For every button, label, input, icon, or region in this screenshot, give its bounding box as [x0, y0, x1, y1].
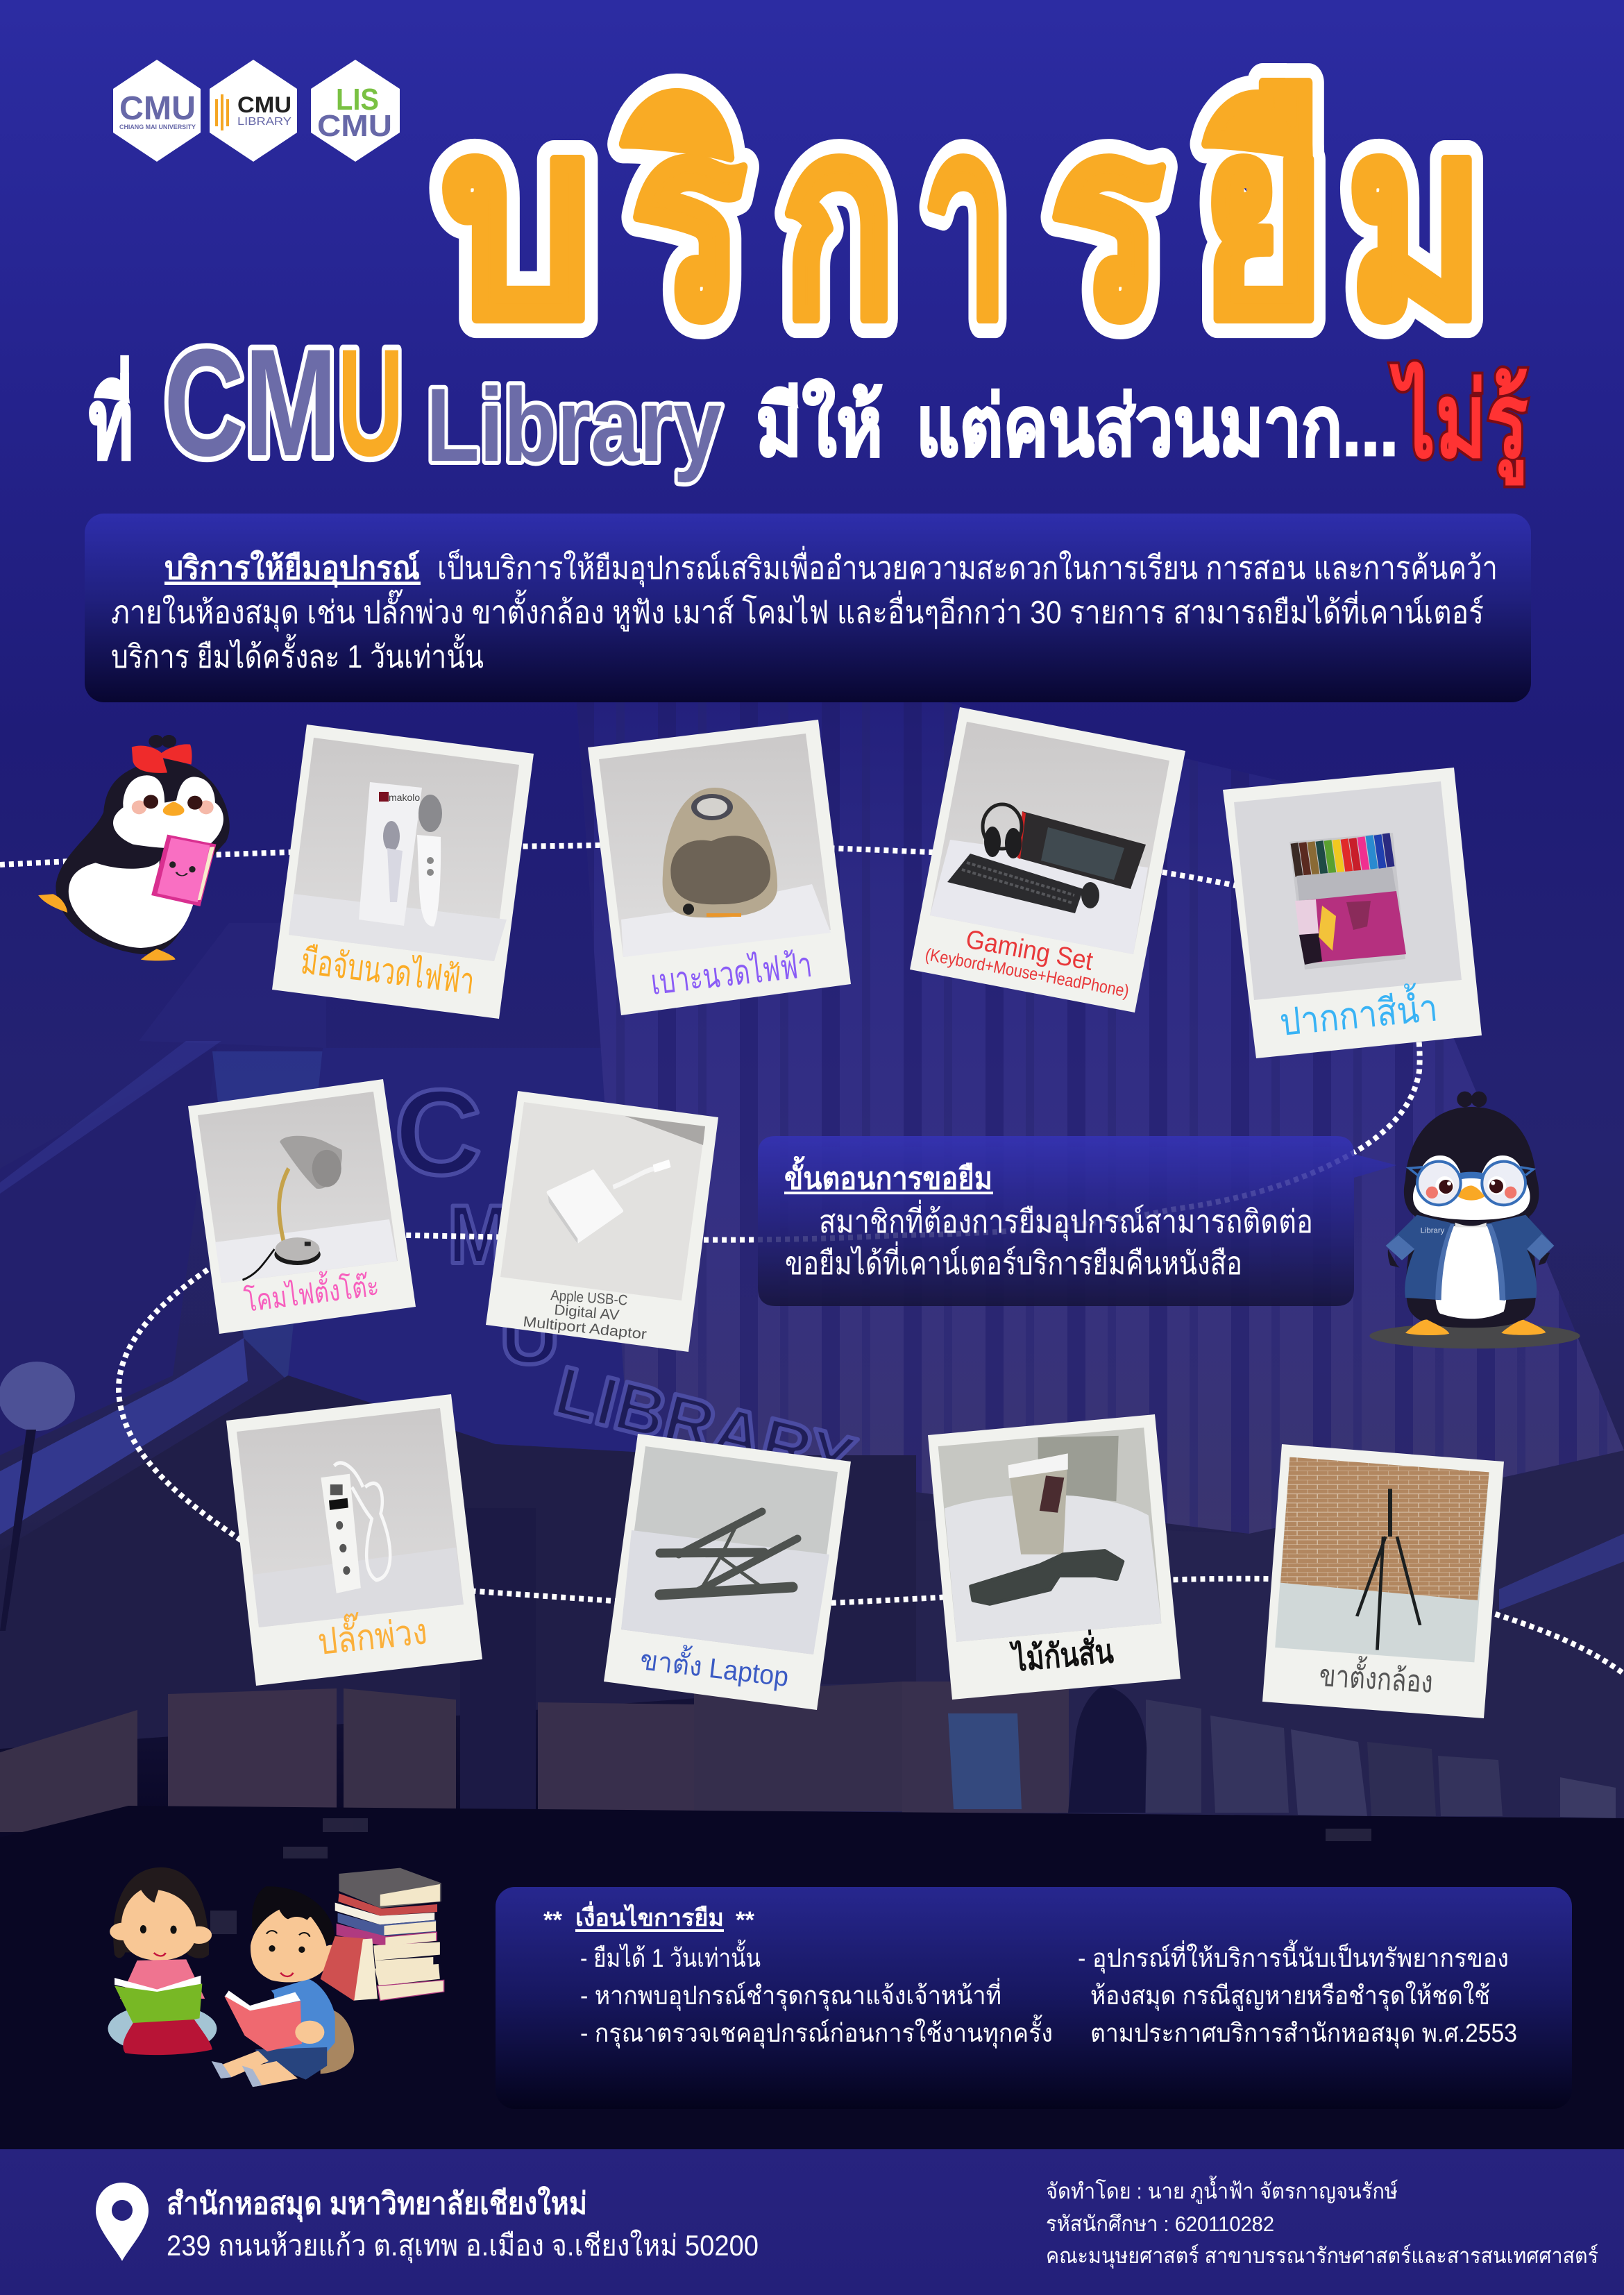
background signage: CMU LIBRARY letters: M — [448, 1188, 510, 1281]
penguin with glasses and jacket — [1369, 1092, 1580, 1348]
photo card: tripod — [1262, 1444, 1504, 1718]
photo card: laptop stand — [604, 1434, 851, 1710]
callout: borrowing steps — [758, 1136, 1396, 1306]
label: ปลั๊กพ่วง — [315, 1605, 429, 1663]
title: ร — [1049, 69, 1164, 372]
title: ก — [781, 69, 896, 372]
footer — [0, 2149, 1624, 2295]
title: ก — [781, 69, 896, 372]
title: ริ — [621, 69, 745, 372]
label: ขาตั้งกล้อง — [1318, 1653, 1435, 1700]
background signage: CMU LIBRARY letters: LIBRARY — [548, 1352, 863, 1501]
label: Gaming Set — [963, 925, 1095, 976]
photo card: power strip — [226, 1394, 482, 1686]
credits: จัดทำโดย : นาย ภูน้ำฟ้า จัตรกาญจนรักษ์ — [1046, 2176, 1398, 2204]
logo: LIS CMU: LIS — [336, 83, 379, 117]
service text: บริการ ยืมได้ครั้งละ 1 วันเท่านั้น — [111, 634, 484, 675]
title: บ — [441, 69, 594, 372]
label — [924, 925, 1131, 1001]
background signage: CMU LIBRARY letters: C — [394, 1065, 482, 1201]
illustration: children reading with books — [108, 1868, 444, 2087]
service text: ภายในห้องสมุด เช่น ปลั๊กพ่วง ขาตั้งกล้อง หูฟัง เมาส์ โคมไฟ และอื่นๆอีกกว่า 30 รายการ สามารถยืมได้ที่เคาน์เตอร์ — [111, 589, 1484, 632]
label: Multiport Adaptor — [522, 1314, 648, 1343]
label: ไม้กันสั่น — [1008, 1627, 1115, 1679]
panel: service description — [85, 514, 1531, 702]
conditions list left: - ยืมได้ 1 วันเท่านั้น — [580, 1939, 761, 1972]
callout heading: ขั้นตอนการขอยืม — [784, 1155, 992, 1196]
illustration: stack of books — [321, 1868, 444, 2001]
icon: location pin — [96, 2183, 149, 2261]
library name and address — [167, 2185, 759, 2264]
subtitle: มีให้ — [756, 379, 883, 473]
photo card: water color pens — [1223, 768, 1482, 1058]
penguin with book — [38, 735, 230, 960]
conditions list left: - กรุณาตรวจเชคอุปกรณ์ก่อนการใช้งานทุกครั้ง — [580, 2014, 1053, 2049]
background: ground floor windows — [0, 1682, 1616, 1832]
photo card: USB-C adapter — [486, 1091, 718, 1352]
conditions list right: ตามประกาศบริการสำนักหอสมุด พ.ศ.2553 — [1090, 2019, 1517, 2049]
subtitle: Library: Library — [426, 366, 722, 483]
photo card: massage wand: makolo — [389, 792, 420, 803]
conditions list left — [580, 1939, 1053, 2049]
background signage: CMU LIBRARY letters — [394, 1065, 863, 1501]
conditions heading: ** — [736, 1907, 755, 1933]
library name and address: สำนักหอสมุด มหาวิทยาลัยเชียงใหม่ — [167, 2185, 587, 2223]
title: า — [923, 69, 1008, 372]
photo card: massage wand — [272, 725, 534, 1019]
logo: CMU Library: CMU — [237, 92, 291, 117]
title: ริ — [621, 69, 745, 372]
title: ร — [1049, 69, 1164, 372]
subtitle — [89, 317, 1528, 488]
label: เบาะนวดไฟฟ้า — [649, 945, 814, 1002]
service text — [111, 545, 1498, 675]
service heading: บริการให้ยืมอุปกรณ์ — [164, 549, 420, 588]
conditions heading: เงื่อนไขการยืม — [575, 1901, 724, 1931]
title: บ — [441, 69, 594, 372]
conditions heading: ** — [543, 1907, 563, 1933]
subtitle: CMU: CM — [164, 317, 337, 488]
icon: pink book — [151, 835, 216, 906]
logo: CMU: CHIANG MAI UNIVERSITY — [119, 124, 196, 130]
conditions list right: - อุปกรณ์ที่ให้บริการนี้นับเป็นทรัพยากรของ — [1078, 1939, 1509, 1974]
credits — [1046, 2176, 1598, 2269]
label: โคมไฟตั้งโต๊ะ — [242, 1264, 381, 1318]
illustration: boy — [212, 1886, 354, 2087]
conditions list right — [1078, 1939, 1517, 2049]
panel: borrowing conditions — [496, 1887, 1572, 2109]
background signage: CMU LIBRARY letters: U — [500, 1289, 560, 1382]
subtitle: ไม่รู้ — [1389, 362, 1528, 486]
photo card: desk lamp — [188, 1079, 416, 1334]
logo: CMU — [113, 60, 201, 162]
label: (Keybord+Mouse+HeadPhone) — [924, 945, 1131, 1001]
callout text: ขอยืมได้ที่เคาน์เตอร์บริการยืมคืนหนังสือ — [785, 1241, 1242, 1281]
photo card: massage cushion — [588, 720, 851, 1015]
title: ยื — [1200, 69, 1325, 372]
service text: เป็นบริการให้ยืมอุปกรณ์เสริมเพื่ออำนวยความสะดวกในการเรียน การสอน และการค้นคว้า — [437, 545, 1498, 588]
subtitle: CMU: U — [337, 317, 404, 488]
conditions heading — [543, 1901, 755, 1933]
callout text: สมาชิกที่ต้องการยืมอุปกรณ์สามารถติดต่อ — [819, 1199, 1313, 1242]
credits: รหัสนักศึกษา : 620110282 — [1046, 2212, 1274, 2236]
dotted path connecting photos — [0, 845, 1624, 1674]
penguin with glasses and jacket: Library — [1421, 1227, 1445, 1235]
logo: CMU: CMU — [119, 90, 196, 127]
logo: LIS CMU: CMU — [317, 109, 392, 143]
title: ม — [1346, 69, 1485, 372]
photo card: gaming set — [910, 707, 1185, 1013]
subtitle: แต่คนส่วนมาก... — [916, 380, 1398, 473]
background: lamp post — [0, 1362, 75, 1631]
title: ยื — [1200, 69, 1325, 372]
logos — [113, 60, 400, 162]
library name and address: 239 ถนนห้วยแก้ว ต.สุเทพ อ.เมือง จ.เชียงใหม่ 50200 — [167, 2229, 759, 2264]
callout text — [785, 1199, 1313, 1281]
label: มือจับนวดไฟฟ้า — [299, 940, 477, 1002]
label — [522, 1287, 648, 1343]
label: ขาตั้ง Laptop — [638, 1639, 791, 1693]
illustration: girl — [108, 1868, 217, 2055]
title: า — [923, 69, 1008, 372]
conditions list left: - หากพบอุปกรณ์ชำรุดกรุณาแจ้งเจ้าหน้าที่ — [580, 1977, 1001, 2011]
subtitle: ที่ — [89, 356, 133, 479]
title: ม — [1346, 69, 1485, 372]
label: ปากกาสีน้ำ — [1278, 981, 1439, 1044]
icon: red bow — [132, 744, 192, 773]
photo card: gimbal stabilizer — [928, 1414, 1181, 1700]
label: Digital AV — [554, 1302, 620, 1323]
logo: LIS CMU — [311, 60, 400, 162]
title — [441, 69, 1485, 372]
label: Apple USB-C — [550, 1287, 628, 1309]
conditions list right: ห้องสมุด กรณีสูญหายหรือชำรุดให้ชดใช้ — [1090, 1981, 1490, 2011]
logo: CMU Library: LIBRARY — [237, 116, 291, 128]
logo: CMU Library — [210, 60, 297, 162]
